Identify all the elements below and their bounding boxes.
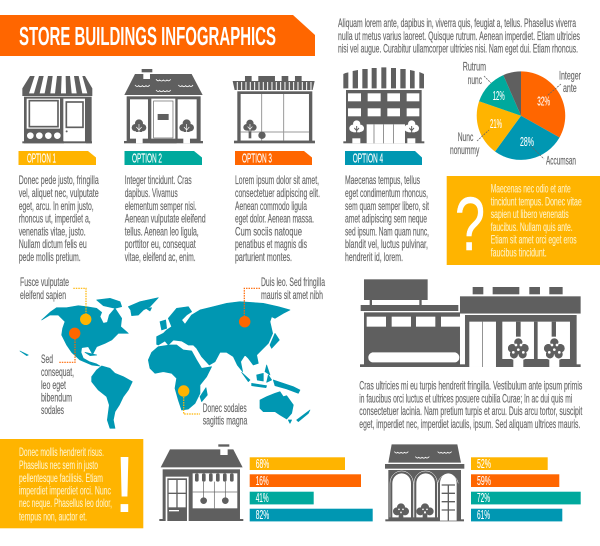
map label: Donec	[203, 401, 248, 428]
option 2 text: vitae, eleifend ac, enim.	[125, 250, 196, 264]
option 2 text: dapibus. Vivamus	[125, 186, 178, 200]
option 3 text: parturient montes.	[235, 250, 292, 264]
icon: large shopping building	[360, 279, 581, 367]
map label: Fusce	[20, 275, 69, 302]
map label: Fusce: Fusce vulputate	[20, 275, 69, 289]
bar chart: arched shop: 72%	[477, 491, 490, 505]
map label: Sed: leo eget	[41, 378, 66, 392]
pie chart: Rutrum	[463, 60, 486, 74]
pie chart: 28%	[520, 135, 534, 149]
title banner: STORE BUILDINGS INFOGRAPHICS	[19, 23, 276, 51]
option tag 1: OPTION 1	[27, 152, 56, 166]
title banner	[0, 15, 315, 56]
option tag 3: OPTION 3	[242, 152, 272, 166]
map label: Sed: bibendum	[41, 390, 72, 404]
pie chart	[450, 60, 581, 168]
option 3 text: Cum sociis natoque	[235, 224, 302, 238]
option 1 text: venenatis vitae, justo.	[19, 224, 86, 238]
option 1 text: rhoncus ut, imperdiet a,	[19, 212, 91, 226]
icon: multi-storey building	[343, 67, 424, 143]
pie chart: nonummy	[450, 143, 479, 157]
bar chart: arched shop: 52%	[477, 457, 491, 471]
bar chart: arched shop: 61%	[477, 508, 490, 522]
option 2 text: Integer tincidunt. Cras	[125, 173, 192, 187]
callout: exclamation	[0, 439, 143, 529]
map label: Sed: sodales	[41, 403, 64, 417]
icon: exclamation mark: !	[113, 440, 136, 529]
pie chart: nunc	[468, 73, 482, 87]
option 2 text: elementum semper nisi.	[125, 199, 197, 213]
map label: Sed: consequat,	[41, 365, 74, 379]
option 4 text: sem quam semper libero, sit	[345, 199, 429, 213]
option 3 text	[235, 173, 320, 264]
icon: arched shop	[385, 444, 464, 521]
option 4 text: sed ipsum. Nam quam nunc,	[345, 224, 429, 238]
option 4 text: amet adipiscing sem neque	[345, 212, 427, 226]
option 3 text: Aenean commodo ligula	[235, 199, 307, 213]
bar chart: small shop: 41%	[256, 491, 269, 505]
map label: Donec: Donec sodales	[203, 401, 247, 415]
option tag 4: OPTION 4	[353, 152, 383, 166]
option 1 text	[19, 173, 99, 264]
option 1 text: eget, arcu. In enim justo,	[19, 199, 94, 213]
callout: exclamation: pellentesque facilisis. Etiam	[19, 471, 103, 485]
bar chart: small shop: 82%	[256, 508, 269, 522]
option 2 text: Aenean vulputate eleifend	[125, 212, 206, 226]
pie chart: 12%	[493, 89, 505, 103]
callout: question	[447, 176, 600, 267]
bar chart: arched shop	[471, 457, 581, 522]
world map	[20, 298, 310, 428]
callout: exclamation: nec neque. Phasellus leo dolor,	[19, 496, 112, 510]
map label: Duis: mauris sit amet nibh	[261, 288, 323, 302]
pie chart: Nunc	[458, 130, 473, 144]
option 2 text: porttitor eu, consequat	[125, 237, 196, 251]
icon: store with striped awning	[22, 76, 92, 143]
map pins	[59, 288, 260, 414]
option 3 text: penatibus et magnis dis	[235, 237, 307, 251]
map label: Duis	[261, 275, 325, 302]
map label: Donec: sagittis magna	[203, 414, 248, 428]
option 1 text: pede mollis pretium.	[19, 250, 81, 264]
map label: Sed	[41, 352, 74, 417]
icon: small shop	[159, 444, 243, 521]
option 1 text: vel, aliquet nec, vulputate	[19, 186, 99, 200]
callout: exclamation: Phasellus nec sem in justo	[19, 458, 98, 472]
option 4 text: blandit vel, luctus pulvinar,	[345, 237, 428, 251]
callout: exclamation: imperdiet imperdiet orci. Nunc	[19, 484, 111, 498]
option 1 text: Nullam dictum felis eu	[19, 237, 87, 251]
option 2 text: tellus. Aenean leo ligula,	[125, 224, 199, 238]
option 1 text: Donec pede justo, fringilla	[19, 173, 99, 187]
map label: Fusce: eleifend sapien	[20, 288, 66, 302]
bar chart: small shop: 16%	[256, 474, 269, 488]
option 3 text: eget dolor. Aenean massa.	[235, 212, 314, 226]
option tag 2: OPTION 2	[132, 152, 162, 166]
option 4 text: hendrerit id, lorem.	[345, 250, 403, 264]
icon: house store with door and trees	[124, 69, 203, 143]
map label: Sed: Sed	[41, 352, 53, 366]
option 3 text: Lorem ipsum dolor sit amet,	[235, 173, 319, 187]
option 2 text	[125, 173, 206, 264]
bar chart: arched shop: 59%	[477, 474, 491, 488]
map label: Duis: Duis leo. Sed fringilla	[261, 275, 325, 289]
pie chart: Integer	[559, 68, 581, 82]
callout: exclamation: tempus non, auctor et.	[19, 510, 87, 524]
intro paragraph	[338, 16, 580, 56]
callout: question: faucibus tincidunt.	[491, 246, 547, 260]
option 4 text	[345, 173, 429, 264]
bar chart: small shop: 68%	[256, 457, 269, 471]
pie chart: ante	[563, 81, 577, 95]
bar chart: small shop	[250, 457, 373, 522]
building description	[359, 378, 583, 431]
option 4 text: eget condimentum rhoncus,	[345, 186, 428, 200]
pie chart: 21%	[490, 117, 502, 131]
callout: exclamation: Donec mollis hendrerit risus.	[19, 445, 104, 459]
option 4 text: Maecenas tempus, tellus	[345, 173, 420, 187]
option 3 text: consectetuer adipiscing elit.	[235, 186, 320, 200]
icon: question mark: ?	[455, 182, 485, 267]
icon: glass front store	[233, 76, 315, 143]
pie chart: 32%	[537, 94, 550, 108]
